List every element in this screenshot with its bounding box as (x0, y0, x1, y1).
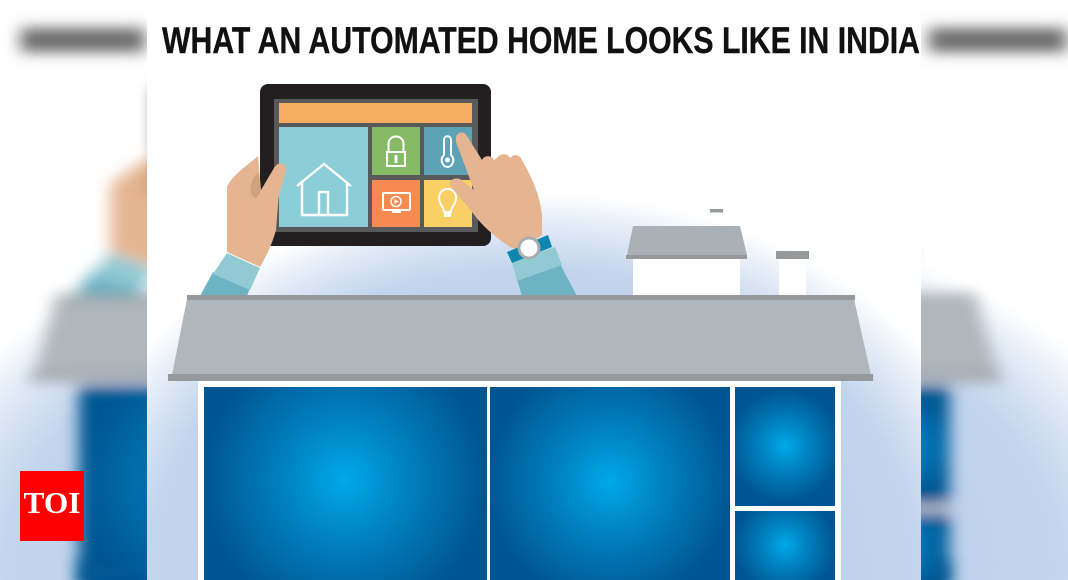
small rooftop house (626, 209, 747, 296)
tablet header bar (279, 103, 472, 123)
title: WHAT AN AUTOMATED HOME LOOKS LIKE IN INDIA (162, 20, 920, 61)
TOI logo (20, 471, 84, 541)
illustration: automated home with tablet and hands (168, 84, 873, 580)
right sleeve (512, 247, 577, 296)
right hand (450, 132, 542, 250)
main house roof (168, 295, 873, 381)
media tile (372, 180, 420, 227)
lock tile (372, 127, 420, 175)
left sleeve (200, 253, 260, 296)
house wall (198, 381, 841, 580)
central infographic panel (147, 0, 921, 580)
window panel: left (204, 387, 487, 580)
thermometer tile (424, 127, 472, 175)
home tile (279, 127, 368, 227)
window panel: upper right (735, 387, 835, 506)
window panel: centre (490, 387, 730, 580)
left hand (227, 156, 286, 267)
wristwatch (507, 235, 552, 263)
light bulb tile (424, 180, 472, 227)
backdrop bottom edge continuation (66, 556, 962, 580)
TOI logo: TOI (24, 485, 80, 520)
window panel: lower right (735, 511, 835, 580)
tablet (260, 84, 491, 246)
chimney (776, 251, 809, 296)
